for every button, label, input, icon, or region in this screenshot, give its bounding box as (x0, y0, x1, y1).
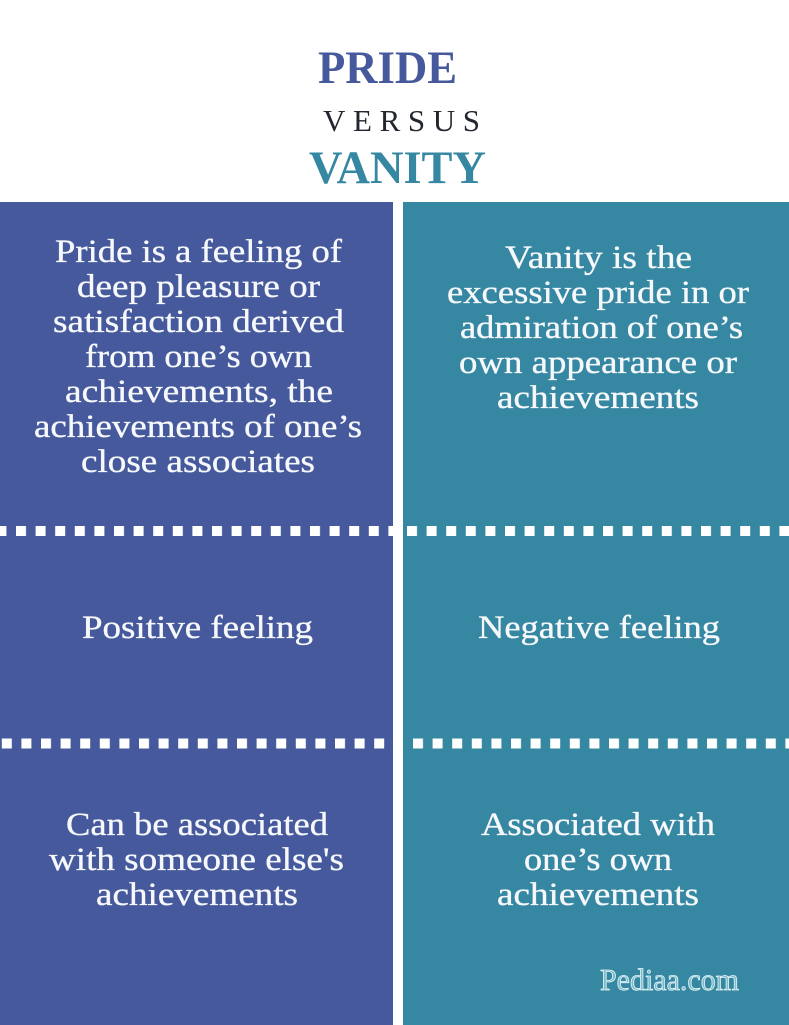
text block: pride association: achievements (96, 877, 298, 913)
text block: vanity definition (447, 240, 749, 416)
panel: pride column (0, 202, 393, 1025)
text block: pride definition (34, 234, 362, 480)
text block: vanity association: Associated with (481, 807, 716, 843)
title: Pride versus Vanity (309, 42, 486, 194)
divider: upper dotted row, right (403, 526, 789, 536)
text block: vanity association (481, 807, 716, 913)
divider: lower dotted row, left (0, 738, 393, 748)
text block: vanity definition: excessive pride in or (447, 275, 749, 311)
text block: pride association (49, 807, 344, 913)
text block: vanity association: achievements (497, 877, 699, 913)
text block: vanity definition: Vanity is the (505, 240, 692, 276)
text block: pride definition: deep pleasure or (77, 269, 320, 305)
heading: Vanity: VANITY (309, 142, 486, 194)
text block: pride definition: from one’s own (85, 339, 312, 375)
text block: vanity feeling: Negative feeling (478, 610, 720, 646)
text block: pride definition: Pride is a feeling of (55, 234, 342, 270)
text block: vanity definition: achievements (497, 380, 699, 416)
panel: vanity column (403, 202, 789, 1025)
text block: vanity association: one’s own (524, 842, 672, 878)
text block: pride definition: achievements, the (65, 374, 333, 410)
divider: lower dotted row, right (413, 738, 789, 748)
text block: vanity definition: admiration of one’s (460, 310, 743, 346)
text block: pride definition: close associates (81, 444, 315, 480)
heading: Pride: PRIDE (318, 42, 457, 94)
text block: vanity definition: own appearance or (459, 345, 737, 381)
logo: Pediaa.com: Pediaa.com (600, 962, 739, 997)
text block: pride feeling: Positive feeling (82, 610, 313, 646)
text block: pride association: Can be associated (66, 807, 329, 843)
text block: pride definition: achievements of one’s (34, 409, 362, 445)
text block: pride association: with someone else's (49, 842, 344, 878)
heading: versus: VERSUS (323, 103, 480, 138)
text block: pride definition: satisfaction derived (53, 304, 345, 340)
divider: upper dotted row, left (0, 526, 393, 536)
